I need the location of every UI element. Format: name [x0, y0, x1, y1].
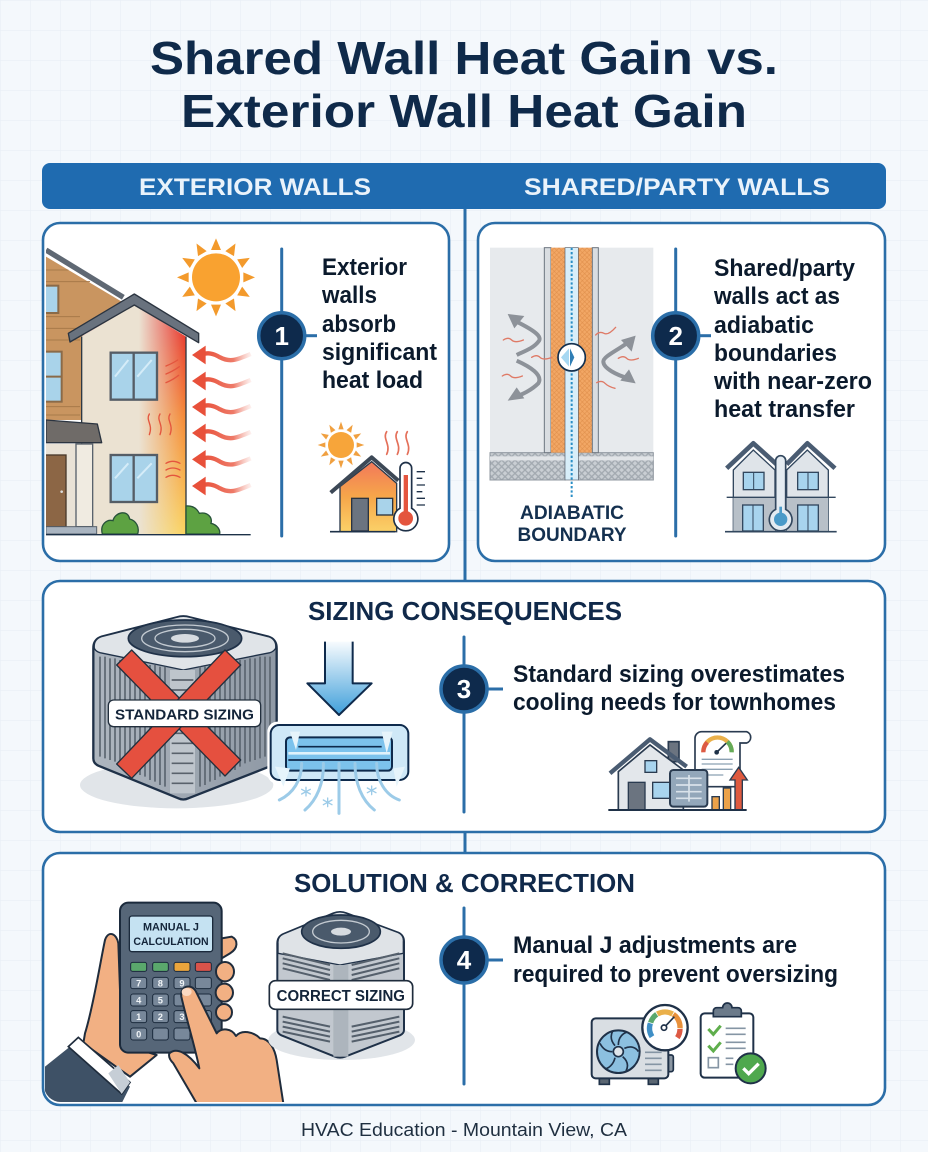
- heat arrows: [202, 353, 251, 491]
- label: adiabatic boundary: BOUNDARY: [518, 525, 627, 546]
- label: correct sizing: [269, 981, 413, 1009]
- divider line and badge 3: [441, 637, 503, 812]
- icon: hot house with thermometer: [318, 422, 425, 532]
- left house siding: [46, 257, 122, 420]
- gripping fingers: [216, 962, 234, 1021]
- text: standard sizing overestimates: cooling needs for townhomes: [513, 689, 836, 716]
- calculator screen text: CALCULATION: [133, 936, 209, 948]
- illustration: hands on calculator: 2: [158, 1012, 163, 1022]
- divider line and badge 1: 1: [274, 321, 289, 351]
- main roof: [68, 294, 199, 343]
- illustration: hands on calculator: 1: [136, 1012, 141, 1022]
- deflected heat arrows: [515, 322, 628, 397]
- illustration: house absorbing heat: [43, 238, 255, 535]
- label: correct sizing: CORRECT SIZING: [277, 988, 405, 1005]
- header bar: [42, 163, 886, 209]
- label: adiabatic boundary: [518, 503, 627, 546]
- calculator body: [120, 903, 222, 1053]
- calculator screen text: [134, 923, 208, 945]
- panel: shared/party walls: [478, 223, 885, 561]
- text: shared walls adiabatic: [713, 255, 872, 423]
- windows: [111, 353, 157, 502]
- icon: heat pump with gauge: [592, 1005, 688, 1084]
- illustration: hands on calculator: [45, 903, 283, 1103]
- illustration: hands on calculator: 8: [158, 978, 163, 988]
- bushes: [102, 513, 138, 534]
- main house wall with heat gradient: [82, 305, 186, 534]
- text: shared walls adiabatic: adiabatic: [714, 312, 814, 339]
- text: exterior walls absorb: Exterior: [322, 254, 407, 281]
- title: Shared Wall Heat Gain vs.: [150, 32, 778, 84]
- text: exterior walls absorb: significant: [322, 339, 437, 366]
- text: exterior walls absorb: heat load: [322, 367, 423, 394]
- text: manual j adjustments: [513, 932, 838, 988]
- sleeve: [45, 1047, 130, 1103]
- text: exterior walls absorb: [321, 254, 437, 394]
- heading: shared/party walls: SHARED/PARTY WALLS: [524, 174, 830, 201]
- divider line and badge 2: [653, 249, 711, 536]
- illustration: hands on calculator: 9: [179, 978, 185, 988]
- icon: house with unit and report: [608, 732, 751, 810]
- title: [150, 32, 778, 137]
- panel: exterior walls: [43, 223, 449, 561]
- text: shared walls adiabatic: boundaries: [714, 340, 837, 367]
- divider line and badge 2: 2: [668, 321, 683, 351]
- pointing hand: [169, 986, 283, 1103]
- illustration: wall cross-section: [490, 248, 653, 497]
- label: adiabatic boundary: ADIABATIC: [520, 503, 624, 524]
- adiabatic seal: [558, 344, 585, 371]
- divider line and badge 4: [441, 908, 503, 1084]
- heading: exterior walls: EXTERIOR WALLS: [139, 174, 371, 201]
- illustration: hands on calculator: 4: [136, 995, 142, 1005]
- title: Exterior Wall Heat Gain: [181, 85, 747, 137]
- sun: [177, 238, 255, 316]
- text: standard sizing overestimates: Standard sizing overestimates: [513, 661, 845, 688]
- down arrow: [307, 642, 372, 715]
- calculator screen text: MANUAL J: [143, 922, 199, 934]
- illustration: correctly sized unit: [268, 912, 415, 1060]
- heading: solution and correction: SOLUTION & CORRECTION: [294, 868, 635, 898]
- text: shared walls adiabatic: heat transfer: [714, 396, 855, 423]
- porch: [46, 420, 102, 443]
- icon: townhouses with thermometer: [725, 443, 837, 532]
- label: standard sizing: [108, 700, 261, 727]
- illustration: hands on calculator: 7: [136, 978, 141, 988]
- red X: [117, 650, 241, 778]
- heading: sizing consequences: SIZING CONSEQUENCES: [308, 596, 622, 626]
- divider line and badge 1: [259, 249, 317, 536]
- text: standard sizing overestimates: [513, 661, 845, 716]
- floor slab: [490, 453, 565, 480]
- text: manual j adjustments: Manual J adjustments are: [513, 932, 797, 959]
- left hand: [83, 934, 157, 1077]
- text: shared walls adiabatic: with near-zero: [713, 368, 872, 395]
- footer: HVAC Education - Mountain View, CA: [301, 1120, 627, 1140]
- label: standard sizing: STANDARD SIZING: [115, 707, 254, 723]
- divider line and badge 4: 4: [457, 945, 472, 975]
- text: exterior walls absorb: absorb: [322, 311, 396, 338]
- panel: sizing consequences: [43, 581, 885, 832]
- panel: solution and correction: [43, 853, 885, 1105]
- icon: checklist clipboard: [701, 1003, 766, 1083]
- wall heat waves: [148, 360, 180, 477]
- wall layers: [544, 248, 551, 453]
- text: manual j adjustments: required to prevent oversizing: [513, 961, 838, 988]
- illustration: oversized unit and frozen mini split: [80, 616, 411, 813]
- text: shared walls adiabatic: Shared/party: [714, 255, 856, 282]
- text: shared walls adiabatic: walls act as: [713, 283, 840, 310]
- divider line and badge 3: 3: [457, 674, 471, 704]
- illustration: hands on calculator: 3: [179, 1012, 185, 1022]
- text: exterior walls absorb: walls: [321, 282, 377, 309]
- calculator buttons: [131, 962, 211, 1040]
- frozen mini split: [267, 722, 411, 813]
- outdoor unit crossed out: [93, 616, 277, 799]
- illustration: hands on calculator: 0: [136, 1029, 141, 1039]
- ground: [46, 534, 251, 536]
- illustration: hands on calculator: 5: [158, 995, 163, 1005]
